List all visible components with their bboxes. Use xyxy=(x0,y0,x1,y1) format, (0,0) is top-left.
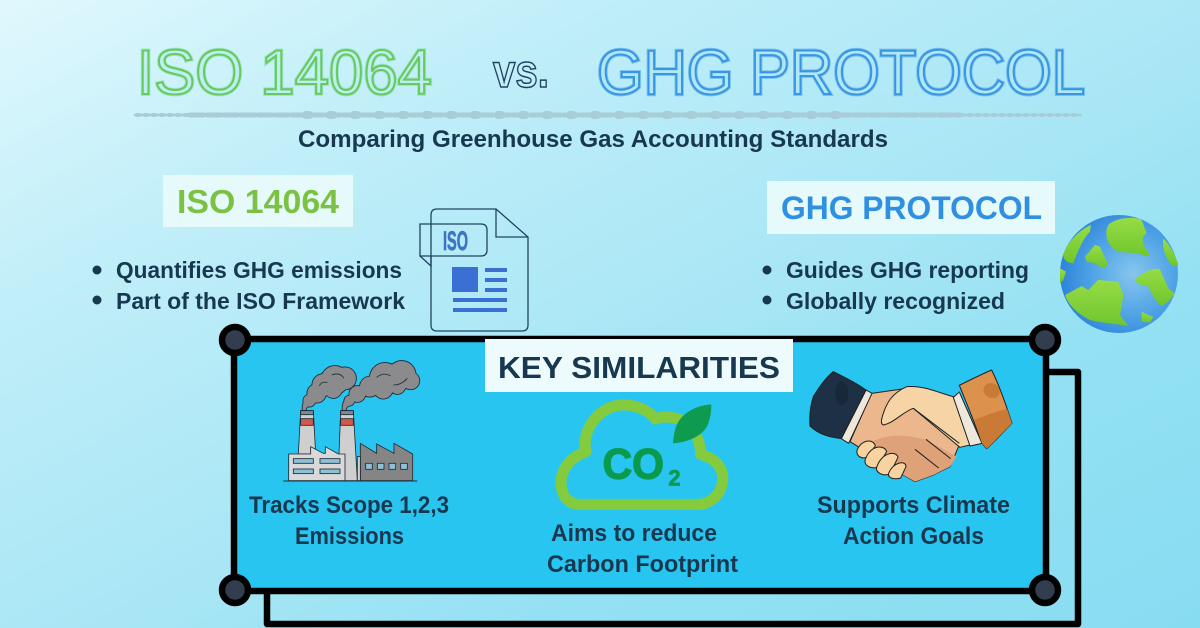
title: GHG PROTOCOL: GHG PROTOCOL xyxy=(597,38,1085,108)
label: supports climate: Supports Climate xyxy=(817,492,1010,519)
label: supports climate xyxy=(817,492,1010,550)
bullet list: GHG Protocol: Guides GHG reporting xyxy=(786,257,1029,283)
leaf xyxy=(673,404,711,443)
panel: key similarities xyxy=(222,327,1078,624)
icon: factory xyxy=(283,361,419,481)
title: ISO 14064: ISO 14064 xyxy=(137,38,432,108)
bullet list: ISO 14064: Quantifies GHG emissions xyxy=(116,257,402,283)
icon: CO2 cloud: CO xyxy=(603,440,664,488)
title: vs.: vs. xyxy=(493,45,549,97)
label: tracks scope: Tracks Scope 1,2,3 xyxy=(249,492,449,519)
bullet list: ISO 14064 xyxy=(92,257,406,314)
icon: ISO document xyxy=(420,209,528,331)
icon: globe xyxy=(1060,215,1178,333)
back frame xyxy=(267,372,1078,624)
heading: key similarities: KEY SIMILARITIES xyxy=(498,350,780,385)
bullet list: ISO 14064: Part of the ISO Framework xyxy=(116,288,406,314)
heading: key similarities xyxy=(485,339,793,392)
icon: ISO document: ISO xyxy=(443,226,468,256)
icon: CO2 cloud: 2 xyxy=(668,465,681,490)
heading: ISO 14064 xyxy=(163,175,353,227)
corner node xyxy=(1032,327,1058,353)
label: aims to reduce xyxy=(547,520,738,578)
label: tracks scope: Emissions xyxy=(295,523,404,550)
corner node xyxy=(1032,577,1058,603)
label: supports climate: Action Goals xyxy=(843,523,984,550)
title: GHG PROTOCOL: GHG PROTOCOL xyxy=(597,38,1085,108)
label: aims to reduce: Carbon Footprint xyxy=(547,551,738,578)
label: aims to reduce: Aims to reduce xyxy=(551,520,717,547)
bullet list: GHG Protocol xyxy=(762,257,1029,314)
smoke xyxy=(303,361,419,410)
corner node xyxy=(222,327,248,353)
heading: GHG PROTOCOL xyxy=(767,181,1055,234)
panel: GHG Protocol xyxy=(762,181,1055,314)
bullet list: GHG Protocol: Globally recognized xyxy=(786,288,1005,314)
title: ISO 14064: ISO 14064 xyxy=(137,38,432,108)
panel: ISO 14064 xyxy=(92,175,406,314)
wave divider xyxy=(135,114,1081,116)
icon: handshake xyxy=(810,370,1012,482)
icon: CO2 cloud xyxy=(561,404,723,504)
heading: GHG PROTOCOL: GHG PROTOCOL xyxy=(781,190,1042,226)
corner node xyxy=(222,577,248,603)
label: tracks scope xyxy=(249,492,449,550)
heading: ISO 14064: ISO 14064 xyxy=(177,183,340,220)
main frame xyxy=(234,339,1046,591)
subtitle: Comparing Greenhouse Gas Accounting Standards xyxy=(298,126,888,153)
